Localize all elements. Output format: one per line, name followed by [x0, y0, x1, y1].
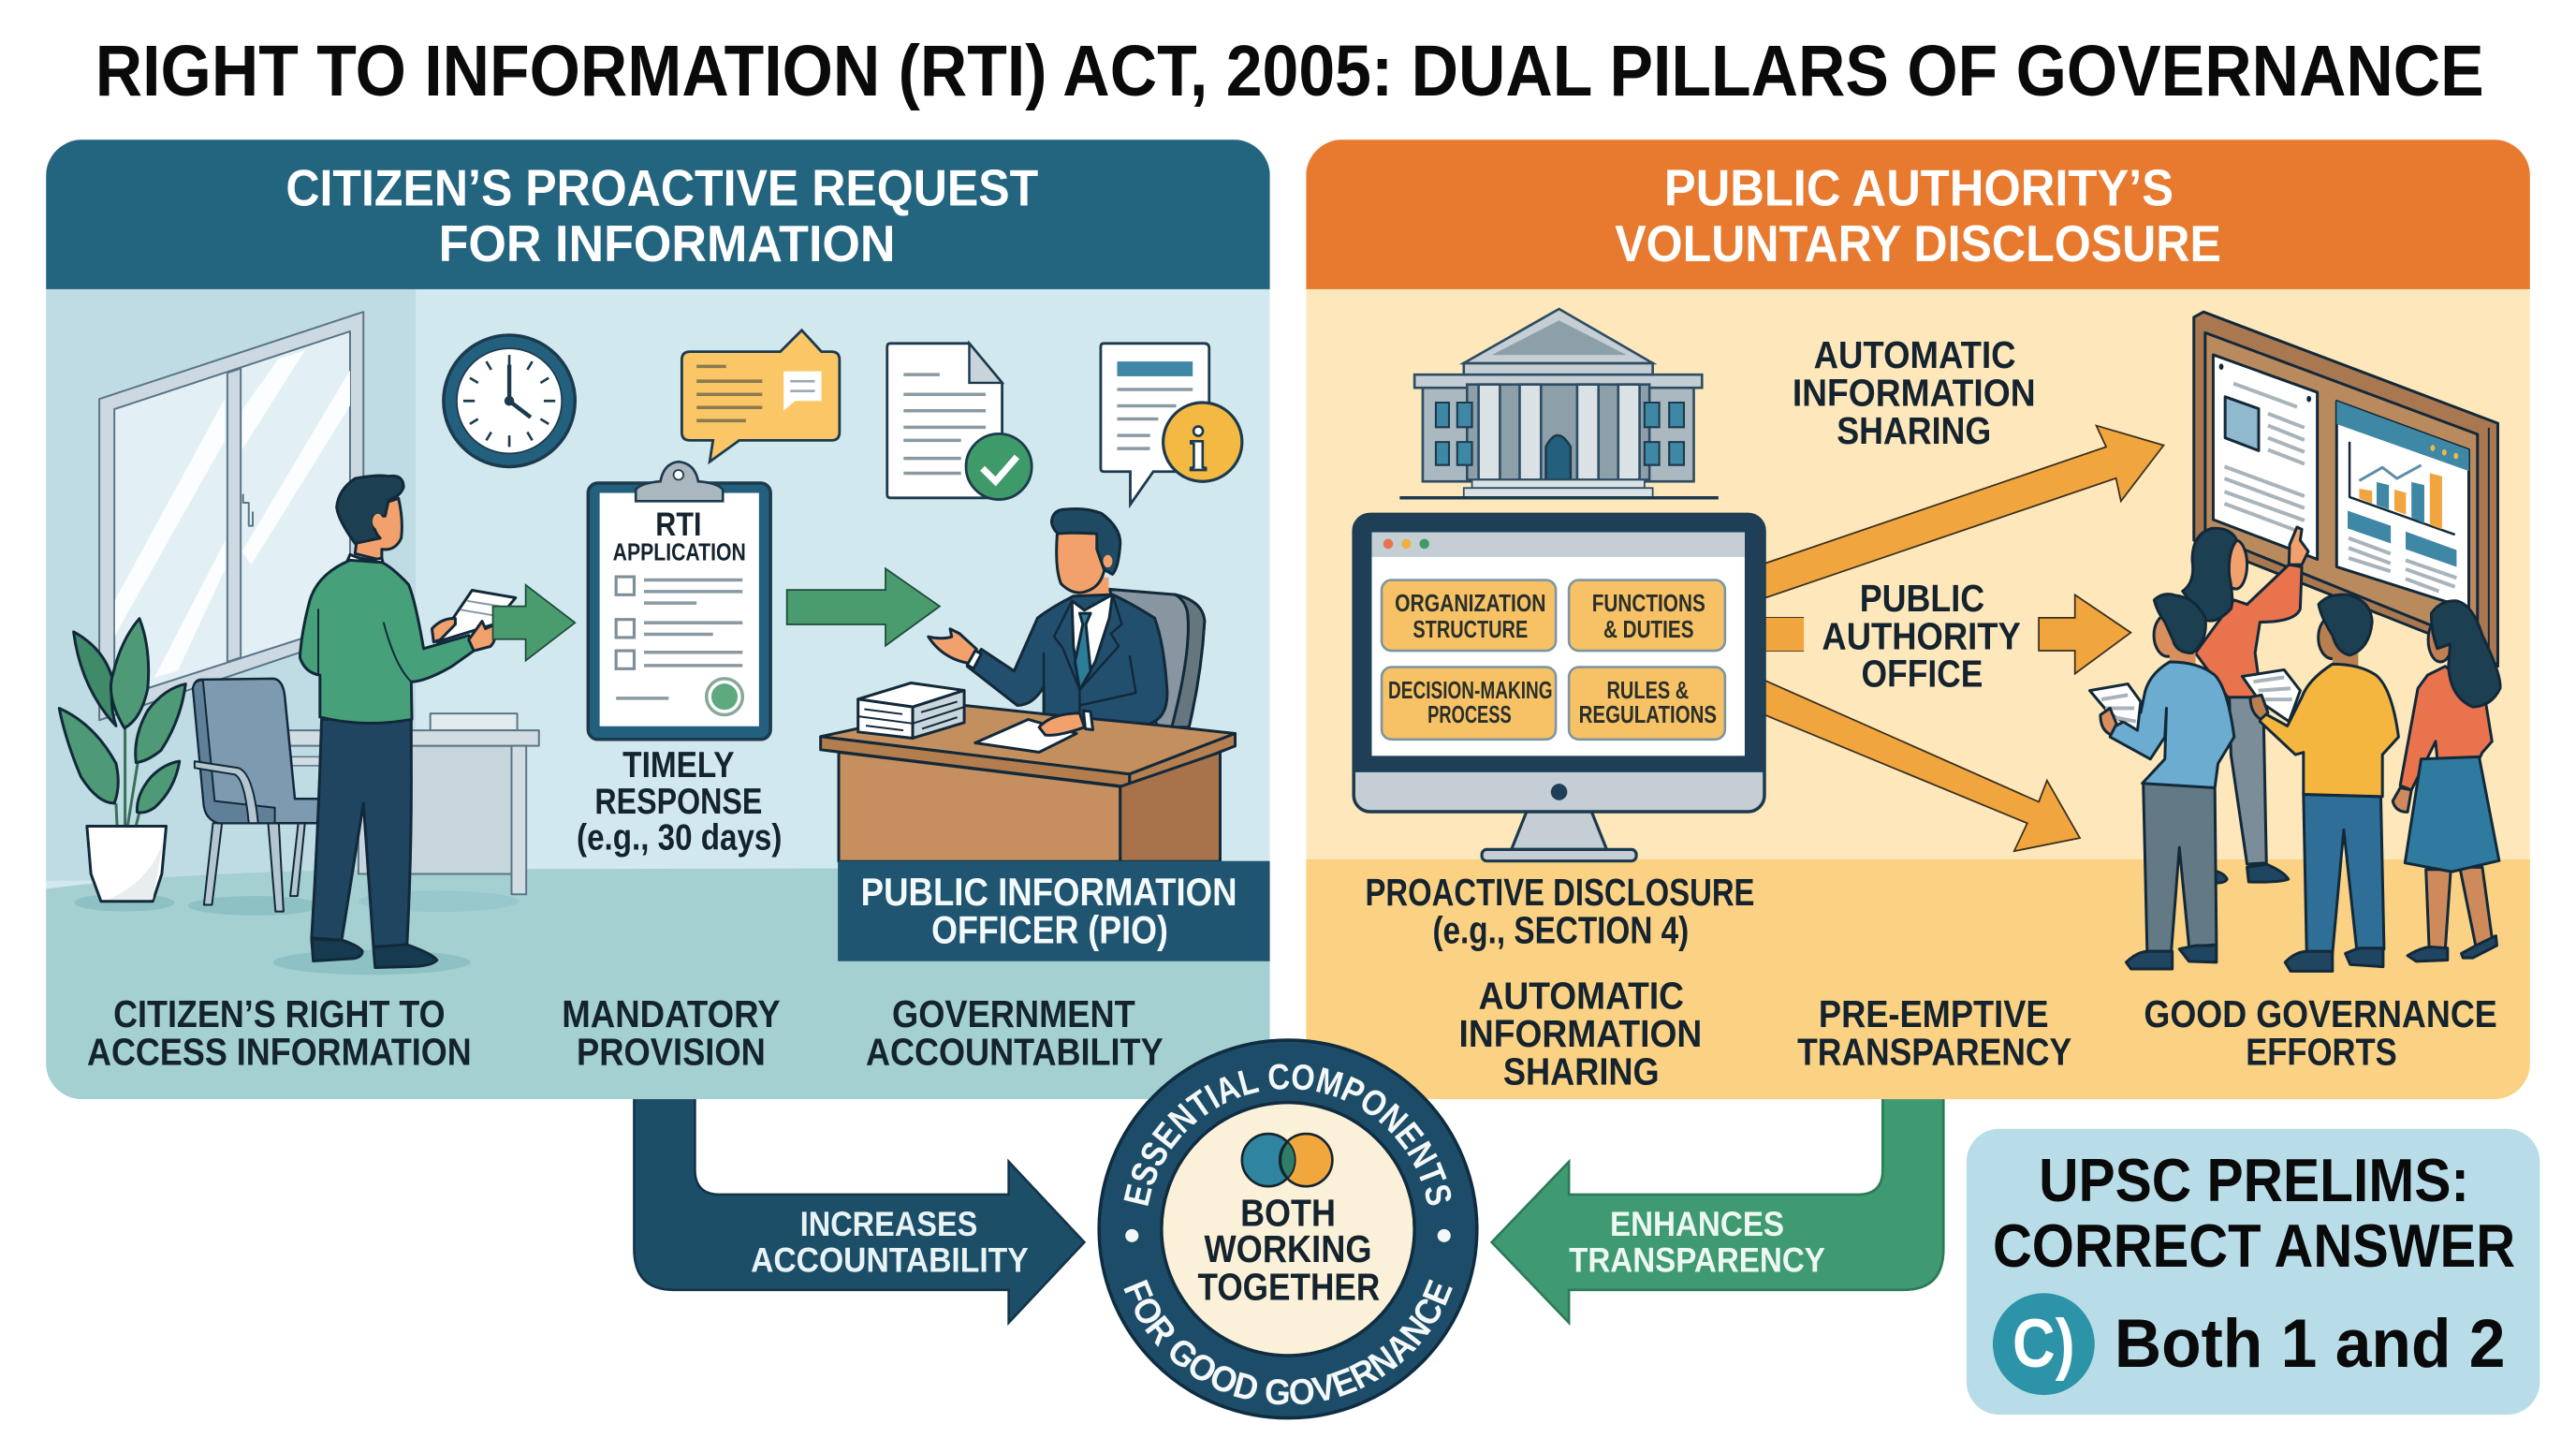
text: proactive disclosure: (e.g., SECTION 4): [1432, 908, 1689, 951]
caption: government accountability: ACCOUNTABILITY: [866, 1030, 1164, 1073]
info box: rules and regulations: RULES &: [1606, 676, 1689, 704]
caption: government accountability: GOVERNMENT: [892, 992, 1135, 1035]
caption: automatic information sharing: INFORMATION: [1459, 1012, 1702, 1055]
info box: organization structure: ORGANIZATION: [1395, 589, 1546, 617]
info box: functions and duties: & DUTIES: [1603, 615, 1694, 643]
connector arrow: enhances transparency: [1492, 1084, 1943, 1323]
arrow: middle stub fill: [1764, 618, 1804, 651]
clipboard: RTI application: [588, 462, 770, 740]
desk front: [839, 752, 1120, 861]
caption: good governance efforts: EFFORTS: [2246, 1030, 2397, 1073]
person: woman pointing at the board: [2183, 527, 2308, 883]
text: proactive disclosure: [1365, 871, 1754, 951]
connector arrow: increases accountability: [634, 1084, 1084, 1323]
citizen collar: [346, 554, 384, 565]
floor: [46, 868, 1270, 1099]
answer badge: C): [2012, 1304, 2075, 1382]
person: man in yellow shirt: [2242, 594, 2398, 971]
desktop monitor: [1354, 514, 1764, 861]
floor shadows: [74, 890, 519, 916]
connector arrow: increases accountability: ACCOUNTABILITY: [751, 1240, 1029, 1279]
clipboard: RTI application: APPLICATION: [613, 537, 746, 565]
chair: [193, 679, 322, 912]
text: public authority office: [1822, 577, 2021, 696]
text: public authority office: AUTHORITY: [1822, 614, 2021, 657]
caption: citizen's right: ACCESS INFORMATION: [87, 1030, 472, 1073]
citizen sweater: [300, 560, 474, 724]
person: man in blue shirt: [2090, 594, 2234, 969]
books: [858, 682, 964, 738]
text: proactive disclosure: PROACTIVE DISCLOSURE: [1365, 871, 1754, 914]
arrow: lower disclosure: [1764, 681, 2080, 851]
central badge: both working together: BOTH: [1240, 1191, 1336, 1234]
caption: automatic information sharing: SHARING: [1503, 1049, 1660, 1093]
officer hair: [1051, 508, 1120, 574]
text: automatic information sharing: AUTOMATIC: [1814, 333, 2016, 376]
text: automatic information sharing: [1793, 333, 2036, 452]
info box: rules and regulations: REGULATIONS: [1579, 700, 1717, 728]
officer lapels: [1044, 594, 1135, 714]
officer's chair side: [1172, 594, 1205, 727]
citizen trousers: [312, 719, 411, 946]
central badge: both working together: WORKING: [1204, 1227, 1372, 1270]
citizen paper: [437, 590, 516, 642]
connector arrow: enhances transparency: TRANSPARENCY: [1569, 1240, 1825, 1279]
label: public information officer: [838, 861, 1270, 961]
icon: info note: i: [1190, 416, 1207, 484]
central badge: both working together: ESSENTIAL COMPONENTS: [1123, 1064, 1451, 1206]
label: public information officer: OFFICER (PIO): [931, 907, 1168, 951]
panel header: CITIZEN’S PROACTIVE REQUEST: [285, 159, 1038, 216]
central badge: both working together: [1097, 1038, 1479, 1419]
text: automatic information sharing: INFORMATION: [1793, 372, 2036, 415]
caption: pre-emptive transparency: PRE-EMPTIVE: [1819, 992, 2049, 1035]
connector arrow: increases accountability: INCREASES: [800, 1205, 977, 1243]
panel header: [1306, 139, 2530, 289]
icon: wall clock: [444, 335, 575, 466]
info box: functions and duties: FUNCTIONS: [1592, 589, 1705, 617]
citizen figure: [273, 476, 516, 975]
officer face: [1057, 532, 1105, 593]
info box: functions and duties: [1569, 580, 1725, 651]
person: woman in skirt: [2393, 601, 2500, 961]
connector arrow: enhances transparency: ENHANCES: [1610, 1205, 1784, 1243]
arrow: top disclosure: [1764, 426, 2163, 598]
chart poster on board: [2336, 402, 2468, 609]
timely response: RESPONSE: [594, 782, 762, 822]
text: public authority office: OFFICE: [1862, 653, 1983, 696]
arrow: middle: [2039, 594, 2130, 674]
info box: decision-making process: [1382, 668, 1556, 740]
officer desk cuff: [1083, 711, 1092, 729]
panel: public authority's voluntary disclosure: [1306, 139, 2530, 1099]
caption: government accountability: [866, 992, 1164, 1073]
arrow: citizen to application: [493, 585, 575, 661]
icon: chat bubble: [681, 330, 840, 462]
citizen shoes: [312, 939, 437, 968]
citizen hands: [432, 619, 496, 651]
desk side: [1120, 752, 1221, 861]
officer neck: [1076, 577, 1108, 595]
desk top: [821, 705, 1236, 774]
info box: rules and regulations: [1569, 668, 1725, 740]
panel header: [46, 139, 1270, 289]
officer cuff: [967, 651, 981, 668]
caption: automatic information sharing: AUTOMATIC: [1479, 975, 1684, 1018]
arrow: middle stub: [1764, 618, 1804, 651]
panel header: VOLUNTARY DISCLOSURE: [1615, 215, 2221, 272]
caption: citizen's right: [87, 992, 472, 1073]
answer badge: [1993, 1293, 2095, 1395]
officer raised hand: [929, 629, 976, 663]
caption: pre-emptive transparency: TRANSPARENCY: [1797, 1030, 2071, 1073]
clipboard: RTI application: RTI: [655, 506, 701, 543]
answer box: CORRECT ANSWER: [1993, 1211, 2515, 1280]
caption: good governance efforts: GOOD GOVERNANCE: [2144, 992, 2497, 1035]
desk paper: [975, 719, 1076, 752]
officer tie: [1075, 613, 1090, 690]
arrow: application to officer: [787, 568, 940, 646]
text: public authority office: PUBLIC: [1860, 577, 1984, 620]
timely response: TIMELY: [622, 745, 735, 785]
icon: government building: [1399, 309, 1719, 498]
answer box: [1967, 1129, 2539, 1415]
caption: mandatory provision: [562, 992, 781, 1073]
icon: overlapping circles: [1242, 1134, 1332, 1186]
officer shirt: [1072, 594, 1112, 690]
info box: organization structure: STRUCTURE: [1412, 615, 1528, 643]
officer desk hand: [1039, 713, 1084, 735]
central badge: both working together: FOR GOOD GOVERNANCE: [1123, 1279, 1453, 1404]
caption: mandatory provision: PROVISION: [577, 1030, 766, 1073]
desk edge: [821, 737, 1130, 787]
icon: info note: [1101, 344, 1242, 505]
caption: pre-emptive transparency: [1797, 992, 2071, 1073]
caption: good governance efforts: [2144, 992, 2497, 1073]
desk side edge: [1130, 733, 1236, 787]
timely response: (e.g., 30 days): [577, 817, 782, 858]
officer scene: [821, 508, 1236, 861]
panel header: FOR INFORMATION: [439, 215, 896, 272]
caption: automatic information sharing: [1459, 975, 1702, 1093]
answer box: UPSC PRELIMS:: [2039, 1146, 2469, 1214]
notice board: [2194, 312, 2497, 667]
label: public information officer: PUBLIC INFORMATION: [861, 870, 1237, 914]
caption: mandatory provision: MANDATORY: [562, 992, 781, 1035]
panel: citizen's proactive request: [46, 139, 1270, 1099]
text: automatic information sharing: SHARING: [1837, 409, 1991, 452]
panel header: PUBLIC AUTHORITY’S: [1664, 159, 2174, 216]
answer box: Both 1 and 2: [2115, 1304, 2506, 1382]
window: [99, 312, 363, 720]
info box: decision-making process: DECISION-MAKING: [1388, 676, 1553, 704]
central badge: both working together: TOGETHER: [1197, 1265, 1380, 1308]
citizen face: [355, 498, 402, 560]
info box: organization structure: [1382, 580, 1556, 651]
back desk: [288, 713, 539, 894]
icon: document with check: [887, 344, 1032, 500]
citizen hair: [337, 476, 403, 543]
officer suit: [967, 594, 1167, 730]
left-side room scene: [59, 312, 539, 975]
info box: decision-making process: PROCESS: [1427, 700, 1512, 728]
document on board: [2213, 355, 2318, 559]
caption: citizen's right: CITIZEN’S RIGHT TO: [113, 992, 446, 1035]
plant: [59, 619, 185, 902]
officer's chair: [1109, 589, 1205, 727]
board and people scene: [2090, 312, 2500, 971]
timely response: [577, 745, 782, 858]
